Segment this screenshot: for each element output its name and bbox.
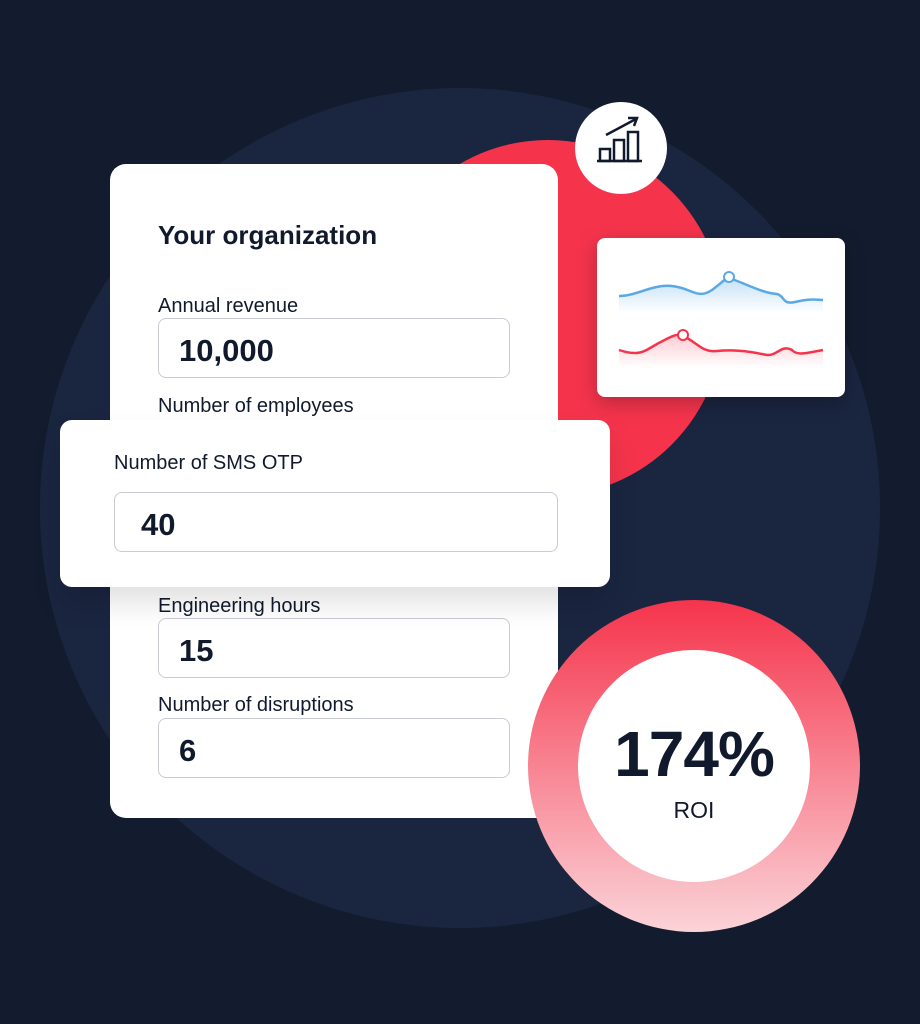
SMS OTP card — [60, 420, 610, 587]
field: disruptions — [158, 694, 510, 778]
ROI value: 174% — [614, 718, 774, 790]
field: engineering hours: 15 — [179, 633, 213, 668]
field: annual revenue: 10,000 — [179, 333, 274, 368]
icon: growth chart — [575, 102, 667, 194]
field: annual revenue — [158, 295, 510, 378]
label: number of employees: Number of employees — [158, 395, 354, 417]
ROI label: ROI — [674, 797, 714, 823]
ROI donut — [528, 600, 860, 932]
field: annual revenue: Annual revenue — [158, 295, 298, 317]
field: engineering hours — [158, 595, 510, 678]
field: disruptions: Number of disruptions — [158, 694, 354, 716]
line chart card — [597, 238, 845, 397]
field: disruptions: 6 — [179, 733, 196, 768]
heading: Your organization — [158, 220, 377, 250]
SMS OTP card: Number of SMS OTP — [114, 452, 303, 474]
background circle — [40, 88, 880, 928]
field: engineering hours: Engineering hours — [158, 595, 320, 617]
red circle — [372, 140, 724, 496]
SMS OTP card: 40 — [141, 507, 175, 542]
main card: your organization — [110, 164, 558, 818]
